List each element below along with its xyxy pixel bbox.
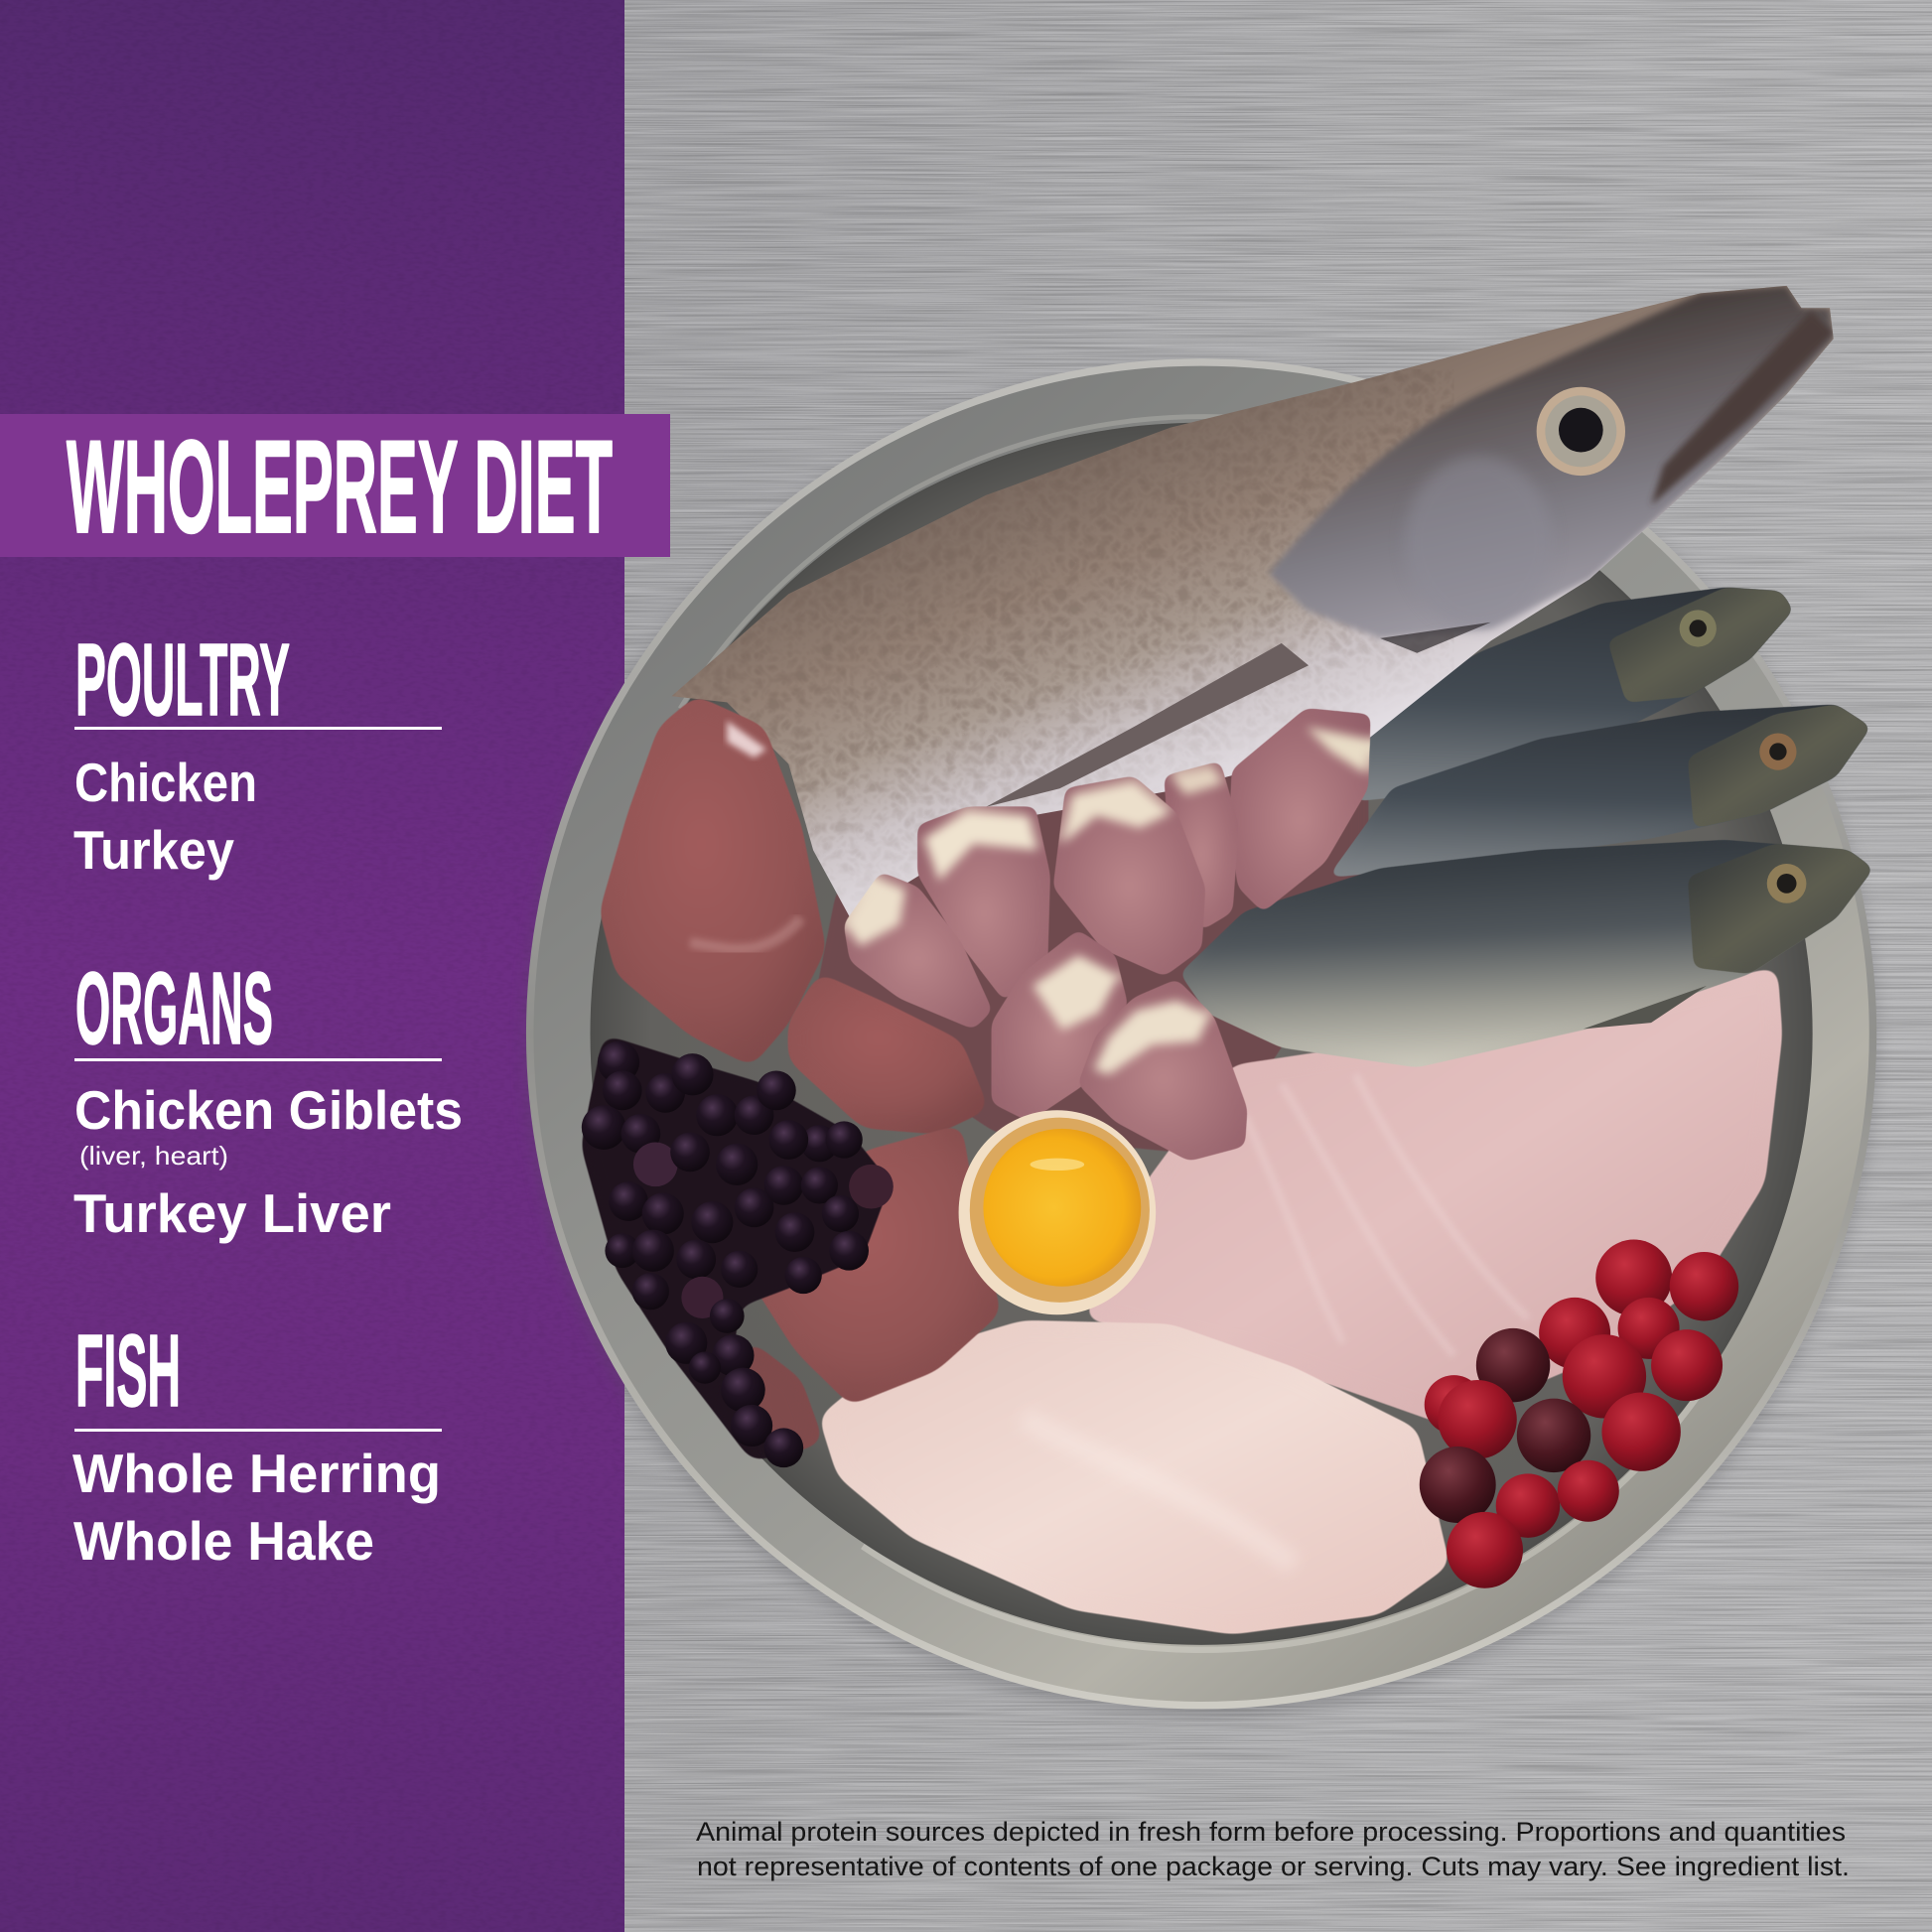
dark blueberries cluster	[582, 1035, 894, 1467]
egg yolk in shell	[959, 1110, 1156, 1314]
list: poultry items: Turkey	[73, 819, 234, 881]
heart 6	[992, 930, 1128, 1121]
lower liver	[746, 1125, 1001, 1453]
section: organs	[73, 951, 463, 1244]
section: fish: FISH	[75, 1313, 181, 1428]
turkey breast	[1084, 967, 1782, 1423]
big liver	[600, 696, 826, 1066]
heart 4	[918, 807, 1049, 1001]
list: poultry items: Chicken	[74, 752, 257, 813]
list: fish items: Whole Hake	[73, 1510, 374, 1572]
list: organ items: Turkey Liver	[73, 1182, 391, 1244]
footnote disclaimer: Animal protein sources depicted in fresh form before processing. Proportions and quantities	[696, 1817, 1846, 1847]
big hake fish	[665, 286, 1834, 936]
title banner	[0, 414, 670, 561]
heart 3	[1053, 776, 1205, 976]
list: organ items: (liver, heart)	[79, 1141, 228, 1171]
herring 1	[1355, 588, 1793, 801]
heart 2	[1165, 761, 1238, 930]
chicken hearts	[844, 709, 1370, 1161]
title banner: WHOLEPREY DIET	[67, 414, 613, 561]
underlay between foods	[813, 715, 1368, 1159]
herring 2	[1328, 705, 1870, 878]
footnote disclaimer: not representative of contents of one package or serving. Cuts may vary. See ingredient list.	[697, 1852, 1850, 1881]
list: organ items	[73, 1079, 463, 1244]
section: poultry: POULTRY	[75, 622, 290, 737]
panel: purple sidebar	[0, 0, 624, 1932]
herring 3	[1180, 840, 1872, 1067]
food bowl photo illustration	[526, 286, 1876, 1717]
list: fish items	[72, 1443, 441, 1572]
list: organ items: Chicken Giblets	[74, 1079, 463, 1141]
section: fish	[72, 1313, 442, 1572]
section: poultry	[73, 622, 442, 881]
heart 7	[1078, 980, 1247, 1161]
heart 1	[1230, 709, 1370, 911]
list: poultry items	[73, 752, 257, 881]
middle liver	[788, 973, 988, 1134]
metal background	[624, 0, 1932, 1932]
heart 5	[844, 873, 992, 1029]
chicken breast	[819, 1320, 1449, 1634]
red cranberries	[1420, 1240, 1738, 1588]
bowl	[526, 358, 1876, 1717]
icon: fish eye	[1537, 387, 1625, 476]
list: fish items: Whole Herring	[72, 1443, 441, 1504]
section: organs: ORGANS	[75, 951, 273, 1065]
footnote disclaimer	[696, 1817, 1850, 1881]
